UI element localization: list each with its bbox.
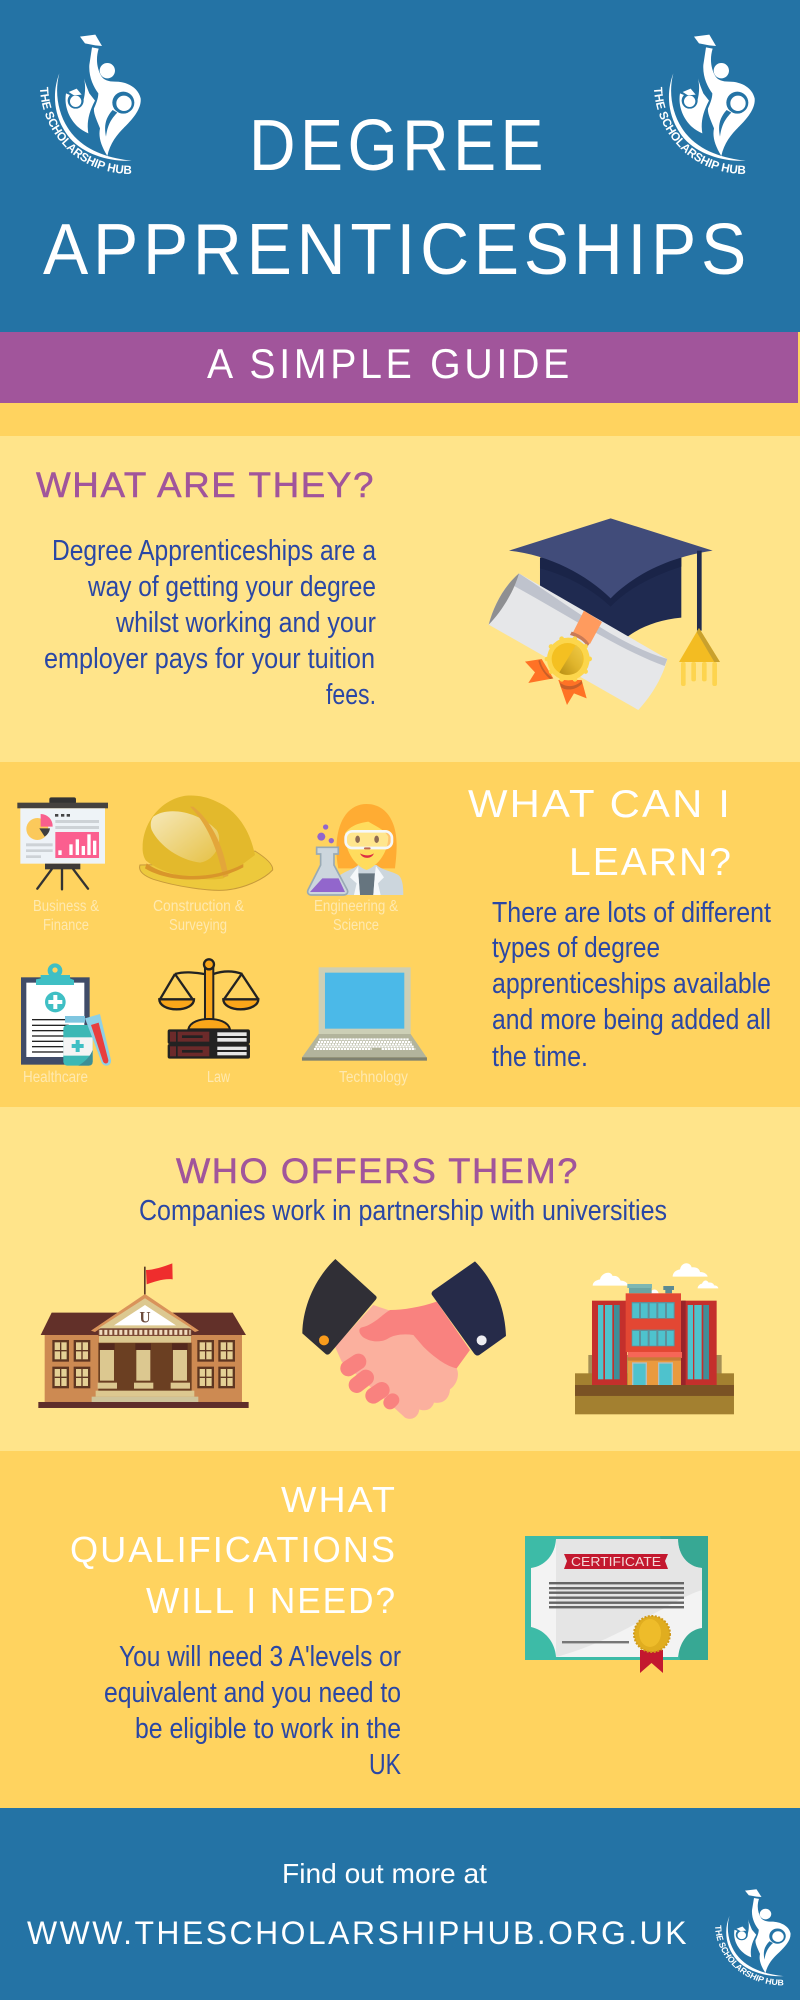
heading: who offers them: WHO OFFERS THEM?	[176, 1152, 579, 1191]
labels: subject areas: Science	[333, 917, 379, 934]
heading: qualifications: WHAT	[281, 1479, 397, 1520]
heading: qualifications: QUALIFICATIONS	[70, 1529, 397, 1570]
text block: requirements: be eligible to work in the	[135, 1713, 401, 1745]
panel: subtitle band	[0, 332, 800, 403]
logo: left	[40, 34, 141, 174]
text block: requirements: equivalent and you need to	[104, 1677, 401, 1709]
text block: learn description	[492, 897, 771, 1073]
icon: certificate: CERTIFICATE	[571, 1554, 661, 1569]
text block: find out more: Find out more at	[282, 1858, 487, 1889]
icon: medical clipboard	[21, 963, 111, 1066]
text block: definition	[44, 535, 376, 711]
link text: website: WWW.THESCHOLARSHIPHUB.ORG.UK	[27, 1915, 689, 1951]
text block: learn description: the time.	[492, 1041, 588, 1073]
title: DEGREE	[249, 106, 548, 186]
title: APPRENTICESHIPS	[43, 210, 751, 290]
icon: hard hat	[140, 796, 273, 890]
logo: right	[654, 34, 755, 174]
icon: university building	[38, 1263, 249, 1408]
text block: definition: Degree Apprenticeships are a	[52, 535, 376, 567]
text block: requirements	[104, 1641, 401, 1781]
icon: company building	[575, 1263, 734, 1414]
windows	[52, 1340, 235, 1388]
logo: right: THE SCHOLARSHIP HUB	[654, 86, 746, 174]
panel: subtitle band: A SIMPLE GUIDE	[207, 340, 573, 387]
text block: definition: fees.	[326, 679, 376, 711]
heading: what can I learn: LEARN?	[569, 841, 733, 884]
labels: subject areas: Construction &	[153, 898, 245, 915]
icon: university building: U	[139, 1310, 151, 1327]
text block: learn description: types of degree	[492, 932, 660, 964]
icon: business presentation	[17, 797, 108, 889]
labels: subject areas: Business &	[33, 898, 100, 915]
panel: footer	[0, 1808, 800, 2000]
logo: footer: THE SCHOLARSHIP HUB	[715, 1925, 784, 1986]
icon: laptop	[302, 967, 427, 1061]
text block: partnership: Companies work in partnership with universities	[139, 1195, 667, 1227]
icon: scales and books	[159, 959, 258, 1059]
icon: scientist with flask	[308, 804, 403, 895]
logo: footer	[715, 1889, 791, 1986]
icon: certificate	[525, 1536, 708, 1673]
labels: subject areas	[23, 898, 408, 1086]
heading: qualifications	[70, 1479, 397, 1621]
panel: who offers them	[0, 1107, 800, 1451]
panel: what can I learn	[0, 762, 800, 1107]
panel: what are they	[0, 436, 800, 762]
title	[43, 106, 751, 290]
labels: subject areas: Technology	[339, 1069, 408, 1086]
text block: definition: way of getting your degree	[87, 571, 376, 603]
logo: left: THE SCHOLARSHIP HUB	[40, 86, 132, 174]
text block: definition: employer pays for your tuition	[44, 643, 375, 675]
panel: header	[0, 0, 800, 332]
panel: what qualifications	[0, 1451, 800, 1808]
heading: what are they: WHAT ARE THEY?	[36, 466, 375, 505]
text block: definition: whilst working and your	[115, 607, 376, 639]
icon: graduation cap and diploma	[489, 518, 720, 710]
labels: subject areas: Surveying	[169, 917, 227, 934]
labels: subject areas: Finance	[43, 917, 89, 934]
labels: subject areas: Law	[207, 1069, 231, 1086]
labels: subject areas: Healthcare	[23, 1069, 88, 1086]
heading: what can I learn: WHAT CAN I	[468, 783, 732, 826]
labels: subject areas: Engineering &	[314, 898, 399, 915]
heading: qualifications: WILL I NEED?	[146, 1580, 397, 1621]
heading: what can I learn	[468, 783, 733, 884]
text block: requirements: UK	[369, 1749, 401, 1781]
text block: requirements: You will need 3 A'levels or	[119, 1641, 401, 1673]
icon: handshake	[302, 1259, 506, 1419]
